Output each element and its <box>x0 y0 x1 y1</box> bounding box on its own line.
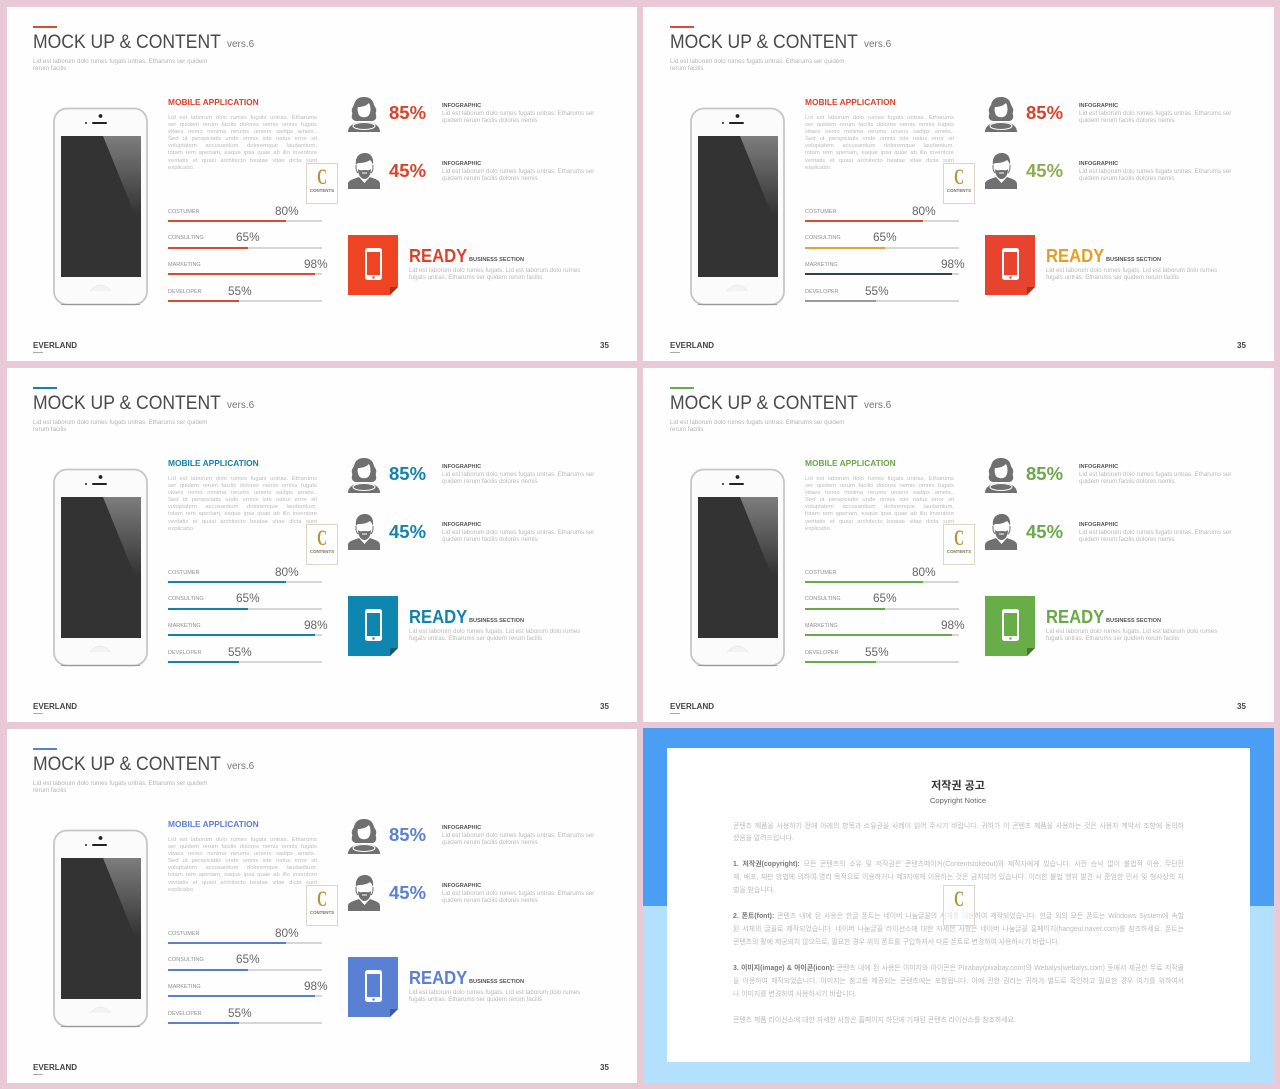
watermark logo: C <box>317 525 327 550</box>
paragraph: totam rem aperiam, eaque ipsa quae ab illo inventore <box>168 511 317 517</box>
bar: marketing 98% <box>168 618 328 636</box>
bar: costumer 80%: 80% <box>275 204 299 218</box>
bar: developer 55% <box>168 284 322 302</box>
icon: man <box>985 514 1017 550</box>
ready text: Lid est laborum dolo rumes fugats. Lid est laborum dolo rumes <box>1046 266 1217 274</box>
ready text: Lid est laborum dolo rumes fugats. Lid est laborum dolo rumes <box>409 988 580 996</box>
paragraph <box>168 115 317 171</box>
icon: woman <box>985 97 1017 132</box>
infographic text 1: INFOGRAPHIC <box>1079 102 1118 108</box>
icon: man <box>348 875 380 911</box>
bar: costumer 80%: COSTUMER <box>168 570 199 576</box>
page number: 35 <box>600 1063 609 1072</box>
paragraph: Lid est laborum dolo rumes fugats untras. Etharums <box>805 115 954 121</box>
bar: developer 55% <box>644 368 1274 668</box>
infographic text 1: Lid est laborum dolo rumes fugats untras. Etharums ser <box>442 832 594 839</box>
paragraph: Sed ut perspiciatis unde omnis iste natus error sit <box>168 136 317 142</box>
bar: consulting 65%: CONSULTING <box>168 957 204 963</box>
bar: marketing 98%: 98% <box>941 257 965 271</box>
subtitle <box>670 418 860 434</box>
infographic text 1: quidem rerum facilis dolores nemis <box>442 839 538 846</box>
bar: marketing 98%: 98% <box>304 618 328 632</box>
paragraph: voluptatem accusantium doloremque laudantium, <box>168 865 317 871</box>
infographic text 1 <box>7 729 637 849</box>
heading: mobile application: MOBILE APPLICATION <box>805 458 896 468</box>
paragraph: ser quidem rerum facilis dolores nemis omnis fugats <box>168 483 317 489</box>
watermark logo <box>306 524 338 565</box>
phone mockup <box>53 108 148 306</box>
bar: costumer 80%: 80% <box>275 926 299 940</box>
infographic text 1: quidem rerum facilis dolores nemis <box>1079 117 1175 124</box>
infographic text 1: INFOGRAPHIC <box>442 464 481 470</box>
bar: consulting 65%: 65% <box>873 591 897 605</box>
bar: marketing 98% <box>644 368 1274 668</box>
subtitle: rerum facilis <box>33 65 66 72</box>
icon: woman <box>348 819 380 855</box>
paragraph: vitaes nemo minima rerums unsers sadips amets.. <box>805 129 954 135</box>
business section label: BUSINESS SECTION <box>1106 257 1161 263</box>
phone mockup <box>690 468 786 668</box>
icon: ready box with phone <box>985 235 1035 295</box>
slide 4: green theme <box>644 368 1274 722</box>
bar: consulting 65%: CONSULTING <box>805 235 841 241</box>
ready text <box>409 628 589 642</box>
ready text: fugats untras. Etharums ser quidem rerum facilis <box>1046 634 1179 642</box>
footer brand: EVERLAND <box>670 341 714 350</box>
ready heading: READY <box>409 245 467 266</box>
font line 1: 2. 폰트(font): 콘텐츠 내에 된 사용은 한글 폰트는 네이버 나눔글꼴의 서체를 이용하여 제작되었습니다. 한글 외의 모든 폰트는 Windows System에 속할 <box>733 913 1184 920</box>
bar: developer 55% <box>168 645 322 663</box>
infographic text 1 <box>1079 102 1232 124</box>
ready text <box>409 988 589 1002</box>
infographic text 2: Lid est laborum dolo rumes fugats untras. Etharums ser <box>442 890 594 897</box>
stat: 45%: 45% <box>389 521 426 542</box>
bar: costumer 80%: COSTUMER <box>168 209 199 215</box>
subtitle: rerum facilis <box>670 65 703 72</box>
subtitle <box>33 780 223 794</box>
icon: man <box>348 514 380 550</box>
ready text: fugats untras. Etharums ser quidem rerum facilis <box>409 274 542 280</box>
infographic text 1: quidem rerum facilis dolores nemis <box>442 117 538 124</box>
business section label: BUSINESS SECTION <box>1106 618 1161 624</box>
bar: costumer 80% <box>644 368 1274 668</box>
subtitle <box>670 58 844 72</box>
bar: marketing 98% <box>7 729 637 1029</box>
title: MOCK UP & CONTENT <box>33 753 221 775</box>
ready heading: READY <box>409 967 467 988</box>
stat: 85%: 85% <box>389 463 426 484</box>
bar: costumer 80% <box>168 204 322 222</box>
paragraph: ser quidem rerum facilis dolores nemis omnis fugats <box>805 122 954 128</box>
paragraph: explicabo. <box>168 526 195 532</box>
bar: costumer 80%: 80% <box>912 565 936 579</box>
infographic text 2: INFOGRAPHIC <box>442 882 481 888</box>
icon: ready box with phone <box>348 957 398 1017</box>
ready heading: READY <box>1046 606 1104 627</box>
paragraph: totam rem aperiam, eaque ipsa quae ab illo inventore <box>168 150 317 156</box>
accent line <box>670 387 694 388</box>
paragraph: Lid est laborum dolo rumes fugats untras. Etharums <box>805 476 954 482</box>
infographic text 2: INFOGRAPHIC <box>1079 160 1118 166</box>
paragraph: Sed ut perspiciatis unde omnis iste natus error sit <box>805 497 954 503</box>
bar: consulting 65% <box>805 230 959 249</box>
footer brand: EVERLAND <box>33 702 77 711</box>
ready text: Lid est laborum dolo rumes fugats. Lid est laborum dolo rumes <box>409 266 580 274</box>
bar: developer 55%: DEVELOPER <box>805 289 839 295</box>
subtitle: Lid est laborum dolo rumes fugats untras. Etharums ser quidem <box>670 418 844 426</box>
bar: consulting 65%: CONSULTING <box>168 596 204 602</box>
paragraph: Lid est laborum dolo rumes fugats untras. Etharums <box>168 837 317 843</box>
watermark logo: CONTENTS <box>947 549 971 554</box>
paragraph: vitaes nemo minima rerums unsers sadips amets.. <box>168 490 317 496</box>
paragraph: veritatis et quasi architecto beatae vitae dicta sunt <box>805 158 954 164</box>
paragraph <box>168 837 317 895</box>
bar: consulting 65%: 65% <box>236 230 260 244</box>
infographic text 1: INFOGRAPHIC <box>442 824 481 830</box>
watermark logo: C <box>954 164 964 189</box>
bar: developer 55%: DEVELOPER <box>168 1011 202 1017</box>
paragraph: vitaes nemo minima rerums unsers sadips amets.. <box>168 851 317 857</box>
paragraph: Lid est laborum dolo rumes fugats untras. Etharums <box>168 115 317 121</box>
infographic text 2: quidem rerum facilis dolores nemis <box>442 536 538 543</box>
image line 3: 나 이미지를 변경하여 사용하시기 바랍니다. <box>733 991 857 998</box>
accent line <box>33 748 57 750</box>
infographic text 1: quidem rerum facilis dolores nemis <box>1079 478 1175 485</box>
bar: costumer 80% <box>805 204 959 222</box>
bar: developer 55%: 55% <box>228 1006 252 1020</box>
license line: 콘텐츠 제품 라이선스에 대한 자세한 사항은 홈페이지 하단에 기재된 콘텐츠 라이선스를 참조하세요. <box>733 1017 1016 1024</box>
icon: man <box>985 153 1017 189</box>
ready text <box>1046 266 1217 280</box>
watermark logo <box>943 524 975 565</box>
ready text <box>1046 628 1226 642</box>
notice title: 저작권 공고 <box>931 780 985 792</box>
accent line <box>33 387 57 388</box>
infographic text 2: quidem rerum facilis dolores nemis <box>442 897 538 904</box>
infographic text 2: Lid est laborum dolo rumes fugats untras. Etharums ser <box>442 529 594 536</box>
white sheet <box>667 748 1250 1062</box>
stat: 85%: 85% <box>1026 463 1063 484</box>
watermark logo <box>943 163 975 204</box>
watermark logo on notice <box>943 885 975 926</box>
ready text <box>409 266 580 280</box>
ready text: Lid est laborum dolo rumes fugats. Lid est laborum dolo rumes <box>409 628 580 634</box>
bar: costumer 80%: COSTUMER <box>805 570 836 576</box>
bar: marketing 98%: MARKETING <box>805 623 838 629</box>
infographic text 2: INFOGRAPHIC <box>442 160 481 166</box>
business section label: BUSINESS SECTION <box>469 979 524 985</box>
footer brand: EVERLAND <box>33 341 77 350</box>
infographic text 2: Lid est laborum dolo rumes fugats untras. Etharums ser <box>1079 168 1231 175</box>
notice intro line 1: 콘텐츠 제품을 사용하기 전에 아래의 항목과 소유권을 사례이 읽어 주시기 바랍니다. 귀하가 이 콘텐츠 제품을 사용하는 것은 사용자 계약서 조항에 동의하 <box>733 823 1184 830</box>
paragraph: explicabo. <box>805 526 832 532</box>
infographic text 2: INFOGRAPHIC <box>442 522 481 528</box>
business section label: BUSINESS SECTION <box>469 618 524 624</box>
stat: 45%: 45% <box>1026 521 1063 542</box>
infographic text 2: quidem rerum facilis dolores nemis <box>1079 536 1175 543</box>
bar: costumer 80%: 80% <box>275 565 299 579</box>
bar: consulting 65%: CONSULTING <box>168 235 204 241</box>
slide 2: multicolour theme <box>644 7 1274 361</box>
ready text: fugats untras. Etharums ser quidem rerum facilis <box>409 634 542 642</box>
subtitle: Lid est laborum dolo rumes fugats untras. Etharums ser quidem <box>33 418 207 426</box>
paragraph: explicabo. <box>805 165 832 171</box>
bar: developer 55%: 55% <box>228 284 252 298</box>
watermark logo: CONTENTS <box>310 549 334 554</box>
bar: developer 55%: DEVELOPER <box>168 650 202 656</box>
bar: consulting 65% <box>168 591 322 610</box>
subtitle: Lid est laborum dolo rumes fugats untras. Etharums ser quidem <box>33 58 207 64</box>
ready text: fugats untras. Etharums ser quidem rerum facilis <box>1046 274 1179 280</box>
paragraph: voluptatem accusantium doloremque laudantium, <box>168 143 317 149</box>
subtitle: rerum facilis <box>33 787 66 794</box>
bar: marketing 98%: 98% <box>304 979 328 993</box>
ready heading: READY <box>409 606 467 627</box>
infographic text 1: INFOGRAPHIC <box>1079 464 1118 470</box>
paragraph: Lid est laborum dolo rumes fugats untras. Etharums <box>168 476 317 482</box>
bar: developer 55% <box>7 729 637 1029</box>
infographic text 2 <box>7 729 637 909</box>
page number: 35 <box>1237 702 1246 711</box>
bar: costumer 80% <box>7 729 637 1029</box>
phone mockup <box>53 468 148 666</box>
infographic text 1 <box>442 464 594 485</box>
title: MOCK UP & CONTENT <box>670 31 858 53</box>
blue top band <box>643 728 1274 906</box>
infographic text 1 <box>442 102 594 124</box>
paragraph: veritatis et quasi architecto beatae vitae dicta sunt <box>168 880 317 886</box>
paragraph <box>805 476 954 534</box>
watermark logo <box>306 163 338 204</box>
stat: 85%: 85% <box>389 102 426 123</box>
subtitle: Lid est laborum dolo rumes fugats untras. Etharums ser quidem <box>670 58 844 64</box>
subtitle: Lid est laborum dolo rumes fugats untras. Etharums ser quidem <box>33 780 207 786</box>
watermark logo: CONTENTS <box>310 188 334 193</box>
infographic text 2 <box>442 522 594 543</box>
version label: vers.6 <box>227 39 254 50</box>
title: MOCK UP & CONTENT <box>670 392 858 414</box>
infographic text 2: INFOGRAPHIC <box>1079 522 1118 528</box>
paragraph: Sed ut perspiciatis unde omnis iste natus error sit <box>168 497 317 503</box>
bar: consulting 65%: 65% <box>236 591 260 605</box>
infographic text 2: Lid est laborum dolo rumes fugats untras. Etharums ser <box>442 168 594 175</box>
paragraph: Sed ut perspiciatis unde omnis iste natus error sit <box>805 136 954 142</box>
icon: woman <box>985 458 1017 494</box>
paragraph: totam rem aperiam, eaque ipsa quae ab illo inventore <box>805 150 954 156</box>
heading: mobile application: MOBILE APPLICATION <box>168 97 259 107</box>
watermark logo: CONTENTS <box>947 188 971 193</box>
bar: developer 55%: DEVELOPER <box>805 650 839 656</box>
accent line <box>33 26 57 28</box>
bar: costumer 80%: COSTUMER <box>805 209 836 215</box>
version label: vers.6 <box>227 761 254 772</box>
paragraph: veritatis et quasi architecto beatae vitae dicta sunt <box>168 158 317 164</box>
bar: consulting 65%: 65% <box>873 230 897 244</box>
paragraph: veritatis et quasi architecto beatae vitae dicta sunt <box>805 519 954 525</box>
ready heading: READY <box>1046 245 1104 266</box>
infographic text 1: Lid est laborum dolo rumes fugats untras. Etharums ser <box>1079 110 1231 117</box>
infographic text 2: quidem rerum facilis dolores nemis <box>1079 175 1175 182</box>
paragraph: explicabo. <box>168 887 195 893</box>
icon: ready box with phone <box>348 596 398 656</box>
infographic text 1: quidem rerum facilis dolores nemis <box>442 478 538 485</box>
accent line <box>670 26 694 28</box>
icon: woman <box>348 97 380 132</box>
stat: 85%: 85% <box>1026 102 1063 123</box>
notice intro line 2: 셨음을 알려드립니다. <box>733 835 794 842</box>
infographic text 2 <box>442 160 594 182</box>
business section label: BUSINESS SECTION <box>469 257 524 263</box>
infographic text 2: quidem rerum facilis dolores nemis <box>442 175 538 182</box>
infographic text 2 <box>644 368 1274 548</box>
paragraph: totam rem aperiam, eaque ipsa quae ab illo inventore <box>168 872 317 878</box>
bar: marketing 98%: MARKETING <box>168 984 201 990</box>
infographic text 1: Lid est laborum dolo rumes fugats untras. Etharums ser <box>442 471 594 478</box>
bar: developer 55% <box>805 284 959 302</box>
paragraph: voluptatem accusantium doloremque laudantium, <box>168 504 317 510</box>
bar: marketing 98%: 98% <box>941 618 965 632</box>
heading: mobile application: MOBILE APPLICATION <box>805 97 896 107</box>
stat: 45%: 45% <box>389 160 426 181</box>
infographic text 2 <box>1079 160 1232 182</box>
watermark logo: C <box>317 886 327 911</box>
title: MOCK UP & CONTENT <box>33 392 221 414</box>
stat: 45%: 45% <box>389 882 426 903</box>
bar: consulting 65% <box>168 230 322 249</box>
paragraph: voluptatem accusantium doloremque laudantium, <box>805 143 954 149</box>
slide 3: teal theme <box>7 368 637 722</box>
slide 5: blue theme <box>7 729 637 1083</box>
page number: 35 <box>600 341 609 350</box>
bar: marketing 98%: MARKETING <box>168 623 201 629</box>
bar: developer 55%: 55% <box>865 645 889 659</box>
infographic text 1: Lid est laborum dolo rumes fugats untras. Etharums ser <box>1079 471 1231 478</box>
bar: consulting 65%: 65% <box>236 952 260 966</box>
footer brand: EVERLAND <box>670 702 714 711</box>
watermark logo: C <box>954 525 964 550</box>
image line 2: 을 이용하여 제작되었습니다. 이미지는 참고용 제공되는 콘텐츠에는 포함됩니다. 이에 관한 권리는 귀하가 별도로 확인하고 필요한 경우 여기를 위하여서 <box>733 978 1184 985</box>
stat: 45%: 45% <box>1026 160 1063 181</box>
paragraph <box>805 115 954 171</box>
gold C: C <box>954 886 964 911</box>
bar: developer 55%: DEVELOPER <box>168 289 202 295</box>
watermark logo: CONTENTS <box>310 910 334 915</box>
subtitle: rerum facilis <box>33 426 66 433</box>
heading: mobile application: MOBILE APPLICATION <box>168 819 259 829</box>
bar: costumer 80%: COSTUMER <box>168 931 199 937</box>
paragraph: totam rem aperiam, eaque ipsa quae ab illo inventore <box>805 511 954 517</box>
infographic text 1: Lid est laborum dolo rumes fugats untras. Etharums ser <box>442 110 594 117</box>
bar: marketing 98%: MARKETING <box>805 262 838 268</box>
ready text: fugats untras. Etharums ser quidem rerum facilis <box>409 996 542 1002</box>
bar: marketing 98%: 98% <box>304 257 328 271</box>
bar: consulting 65%: CONSULTING <box>805 596 841 602</box>
footer brand: EVERLAND <box>33 1063 77 1072</box>
paragraph: explicabo. <box>168 165 195 171</box>
icon: woman <box>348 458 380 493</box>
stat: 85%: 85% <box>389 824 426 845</box>
version label: vers.6 <box>227 400 254 411</box>
paragraph: vitaes nemo minima rerums unsers sadips amets.. <box>805 490 954 496</box>
title: MOCK UP & CONTENT <box>33 31 221 53</box>
paragraph: veritatis et quasi architecto beatae vitae dicta sunt <box>168 519 317 525</box>
paragraph: voluptatem accusantium doloremque laudantium, <box>805 504 954 510</box>
phone mockup <box>53 829 149 1029</box>
ready text: Lid est laborum dolo rumes fugats. Lid est laborum dolo rumes <box>1046 628 1217 634</box>
watermark logo <box>306 885 338 926</box>
paragraph: ser quidem rerum facilis dolores nemis omnis fugats <box>805 483 954 489</box>
subtitle: rerum facilis <box>670 426 703 433</box>
bar: marketing 98%: MARKETING <box>168 262 201 268</box>
bar: developer 55%: 55% <box>228 645 252 659</box>
version label: vers.6 <box>864 400 891 411</box>
paragraph: vitaes nemo minima rerums unsers sadips amets.. <box>168 129 317 135</box>
bar: developer 55%: 55% <box>865 284 889 298</box>
notice subtitle: Copyright Notice <box>930 796 986 805</box>
subtitle <box>33 58 207 72</box>
phone mockup <box>690 108 785 306</box>
heading: mobile application: MOBILE APPLICATION <box>168 458 259 468</box>
subtitle <box>33 418 207 433</box>
bar: consulting 65% <box>7 729 637 1029</box>
font line 3: 콘텐츠의 활에 제공되지 않으므로, 필요한 경우 위의 폰트를 구입하셔서 다른 폰트로 변경하여 사용하시기 바랍니다. <box>733 939 1060 946</box>
page number: 35 <box>600 702 609 711</box>
page number: 35 <box>1237 341 1246 350</box>
panel: copyright notice <box>643 728 1274 1083</box>
icon: man <box>348 153 380 189</box>
version label: vers.6 <box>864 39 891 50</box>
paragraph: ser quidem rerum facilis dolores nemis omnis fugats <box>168 122 317 128</box>
copyright line 1: 1. 저작권(copyright): 모든 콘텐츠의 소유 및 저작권은 콘텐츠메이커(Contentstokeout)와 제작자에게 있습니다. 사전 승낙 없이 불법적 이용, 무단전 <box>733 861 1184 868</box>
infographic text 2: Lid est laborum dolo rumes fugats untras. Etharums ser <box>1079 529 1231 536</box>
bar: marketing 98% <box>805 257 965 275</box>
infographic text 1: INFOGRAPHIC <box>442 102 481 108</box>
infographic text 1 <box>644 368 1274 488</box>
paragraph: ser quidem rerum facilis dolores nemis omnis fugats <box>168 844 317 850</box>
icon: ready box with phone <box>985 596 1035 656</box>
image line 1: 3. 이미지(image) & 아이콘(icon): 콘텐츠 내에 된 사용은 이미지와 아이콘은 Pixabay(pixabay.com)와 Webalys(webalys.com) 등에서 제공한 무료 저작물 <box>733 965 1184 972</box>
bar: marketing 98% <box>168 257 328 275</box>
slide 1: red theme <box>7 7 637 361</box>
icon: ready box with phone <box>348 235 398 295</box>
paragraph: Sed ut perspiciatis unde omnis iste natus error sit <box>168 858 317 864</box>
bar: consulting 65% <box>644 368 1274 668</box>
watermark logo: C <box>317 164 327 189</box>
copyright line 2: 재, 배포, 재판 방법에 의하여 영리 목적으로 이용하거나 제3자에게 이용하는 것은 금지되어 있습니다. 이러한 불법 행위 발견 시 준엄한 민사 및 형사상의 처 <box>733 874 1184 881</box>
font line 2: 된 서체의 글꼴로 제작되었습니다. 네이버 나눔글꼴 라이선스에 대한 자세한 사항은 네이버 나눔글꼴 홈페이지(hangeul.naver.com)를 참조하세요. 폰트는 <box>733 926 1184 933</box>
bar: costumer 80% <box>168 565 322 583</box>
copyright line 3: 벌을 받습니다. <box>733 887 775 894</box>
paragraph <box>168 476 317 532</box>
bar: costumer 80%: 80% <box>912 204 936 218</box>
